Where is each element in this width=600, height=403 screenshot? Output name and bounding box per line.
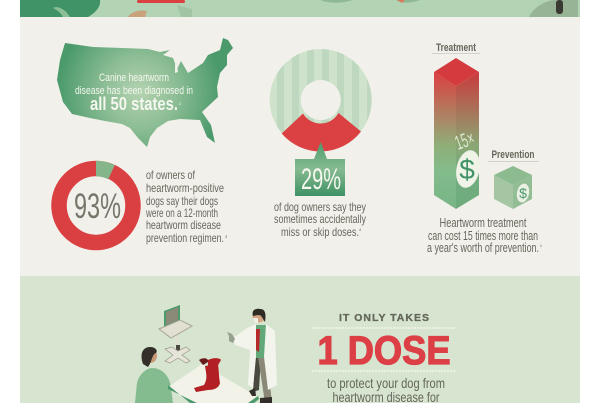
prevention label: Prevention <box>492 149 535 161</box>
map text: all 50 states. <box>90 94 178 114</box>
93% description: heartworm disease <box>146 218 221 232</box>
kicker: IT ONLY TAKES <box>339 312 429 324</box>
93% donut <box>59 161 133 242</box>
prevention cube: $ <box>519 185 527 201</box>
pointing hand <box>227 332 235 343</box>
top illustration strip <box>20 0 580 17</box>
29% description: sometimes accidentally <box>274 212 366 226</box>
map text: disease has been diagnosed in <box>75 85 193 97</box>
shirt and tie <box>253 325 266 358</box>
owner figure <box>135 347 173 403</box>
93% description: heartworm-positive <box>146 181 224 195</box>
treatment bar <box>432 42 483 209</box>
green wedge <box>96 161 115 179</box>
dose text: to protect your dog from <box>327 375 445 391</box>
exam table <box>168 364 259 403</box>
map text: Canine heartworm <box>99 72 169 84</box>
green bottom panel <box>20 276 580 403</box>
93% description: 3 <box>225 234 228 239</box>
cost description: 1 <box>540 243 543 248</box>
29% description: 4 <box>359 227 362 232</box>
US map panel <box>57 38 233 147</box>
29% callout: 29% <box>301 163 341 196</box>
29% description: of dog owners say they <box>274 200 366 214</box>
15x label: 15× <box>452 128 478 155</box>
prevention cube <box>488 149 539 209</box>
93% description: prevention regimen. <box>146 231 224 245</box>
big number: 1 DOSE <box>318 329 450 373</box>
dollar coin <box>453 148 483 190</box>
cost description: can cost 15 times more than <box>428 229 538 243</box>
treatment bar: $ <box>459 154 475 185</box>
map shape <box>57 38 233 147</box>
dog <box>194 358 221 392</box>
treatment label: Treatment <box>436 42 476 54</box>
cost description <box>427 216 543 255</box>
29% description: miss or skip doses. <box>281 225 359 239</box>
93% description <box>145 168 228 245</box>
cream panel background <box>20 17 580 277</box>
93% description: dogs say their dogs <box>146 194 218 208</box>
legs <box>252 355 261 392</box>
29% donut chart <box>270 49 372 151</box>
coat <box>233 324 256 388</box>
map text: 2 <box>179 101 182 106</box>
red wedge <box>282 113 361 151</box>
map text <box>75 72 193 114</box>
donut value: 93% <box>74 187 121 226</box>
lake <box>175 58 178 73</box>
29% callout <box>295 142 345 196</box>
vet figure <box>227 309 277 403</box>
93% description: of owners of <box>146 168 195 182</box>
small coin <box>515 182 531 204</box>
29% description <box>274 200 366 239</box>
93% description: were on a 12-month <box>145 206 218 220</box>
dose message <box>313 312 456 403</box>
ultrasound machine <box>159 305 192 363</box>
head and hair <box>252 310 266 322</box>
cost description: Heartworm treatment <box>440 216 527 230</box>
cost description: a year's worth of prevention. <box>427 241 539 255</box>
